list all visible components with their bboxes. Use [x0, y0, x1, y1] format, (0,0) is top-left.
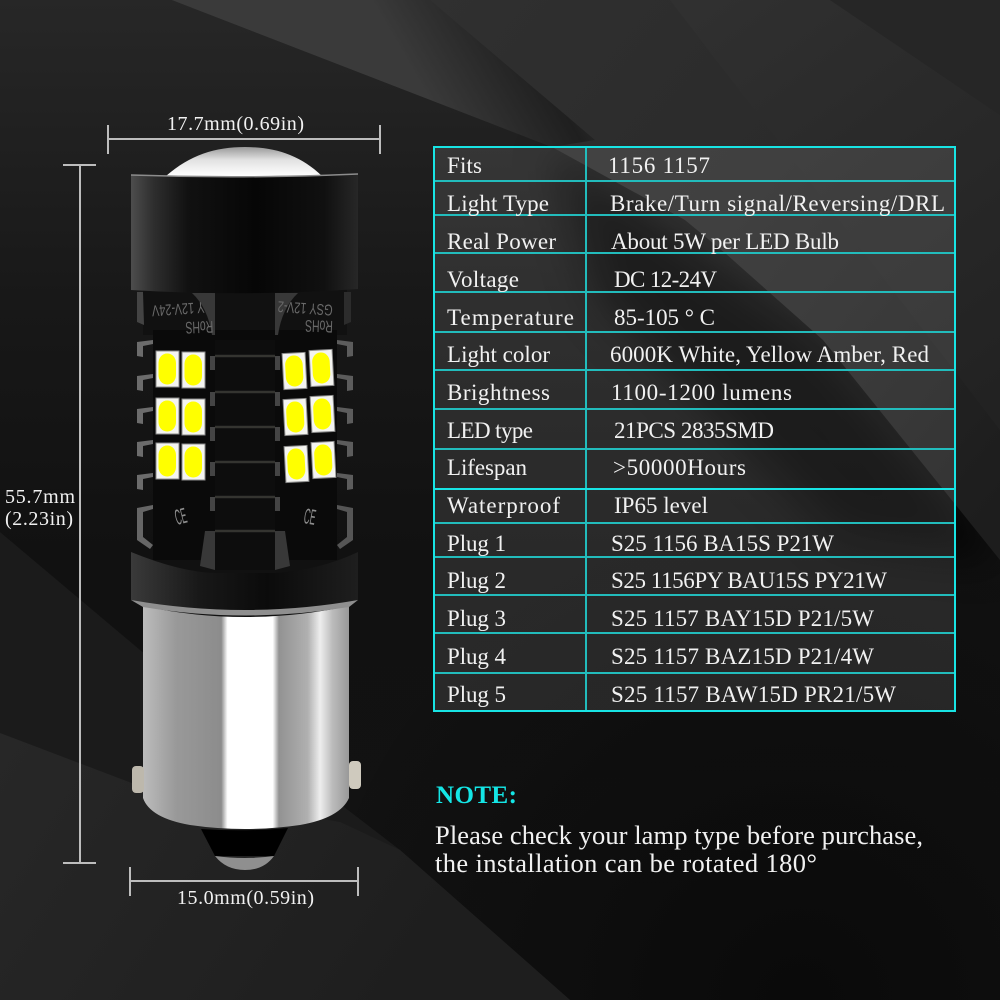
bayonet pin right — [349, 761, 361, 789]
printed board marks: GSY 12V-2 — [277, 298, 333, 319]
bayonet pin left — [132, 766, 144, 793]
printed board marks: CE — [302, 505, 318, 530]
printed board marks: CE — [173, 504, 189, 530]
row: brightness: Brightness — [447, 380, 550, 405]
row: LED type: LED type — [447, 418, 533, 443]
width dimension: 17.7mm — [108, 113, 380, 154]
silver base — [143, 606, 349, 829]
bulb illustration — [131, 147, 361, 870]
row: real power — [447, 229, 839, 254]
row: light type: Brake/Turn signal/Reversing/DRL — [610, 191, 945, 216]
row: plug 1: S25 1156 BA15S P21W — [611, 531, 834, 556]
row: voltage — [447, 267, 717, 292]
bulb body — [137, 285, 351, 570]
LED chips right — [282, 349, 336, 483]
row: real power: Real Power — [447, 229, 556, 254]
note text — [435, 820, 923, 878]
contact tip — [201, 828, 288, 870]
row: voltage: Voltage — [447, 267, 519, 292]
printed board marks: RoHS — [305, 316, 333, 337]
row: plug 1: Plug 1 — [447, 531, 506, 556]
row: fits — [447, 153, 710, 178]
cap rim highlight — [131, 174, 358, 177]
row: plug 4 — [447, 644, 874, 669]
row: lifespan: >50000Hours — [613, 455, 746, 480]
note heading: NOTE: — [436, 782, 517, 809]
row: light type: Light Type — [447, 191, 549, 216]
row: temperature — [447, 305, 715, 330]
top cap — [131, 174, 358, 293]
row: plug 4: Plug 4 — [447, 644, 506, 669]
specification table — [434, 147, 955, 711]
row: voltage: DC 12-24V — [614, 267, 717, 292]
lower collar — [131, 552, 358, 612]
row: plug 5: Plug 5 — [447, 682, 506, 707]
note text: the installation can be rotated 180° — [435, 848, 817, 878]
row: fits: 1156 1157 — [608, 153, 710, 178]
row: lifespan — [447, 455, 746, 480]
row: plug 3 — [447, 606, 874, 631]
row: plug 2: Plug 2 — [447, 568, 506, 593]
row: waterproof — [447, 493, 708, 518]
row: waterproof: Waterproof — [447, 493, 560, 518]
row: LED type: 21PCS 2835SMD — [614, 418, 774, 443]
row: plug 2 — [447, 568, 887, 593]
row: temperature: 85-105 ° C — [614, 305, 715, 330]
row: plug 5 — [447, 682, 896, 707]
fins — [137, 340, 353, 549]
row: fits: Fits — [447, 153, 482, 178]
row: lifespan: Lifespan — [447, 455, 528, 480]
row: light color: 6000K White, Yellow Amber, Red — [610, 342, 930, 367]
height dimension: 55.7mm: (2.23in) — [5, 508, 73, 530]
row: waterproof: IP65 level — [614, 493, 708, 518]
table panel fill — [434, 147, 955, 711]
printed board marks: Y 12V-24V — [151, 299, 205, 319]
row: temperature: Temperature — [447, 305, 574, 330]
row: light type — [447, 191, 945, 216]
row: plug 5: S25 1157 BAW15D PR21/5W — [611, 682, 896, 707]
row: light color: Light color — [447, 342, 550, 367]
row: LED type — [447, 418, 774, 443]
row: brightness: 1100-1200 lumens — [611, 380, 792, 405]
row: plug 1 — [447, 531, 834, 556]
printed board marks: RoHS — [185, 317, 214, 338]
width dimension: 17.7mm: 17.7mm(0.69in) — [167, 113, 304, 135]
note text: Please check your lamp type before purchase, — [435, 820, 923, 850]
row: real power: About 5W per LED Bulb — [611, 229, 839, 254]
LED chips left — [156, 351, 205, 480]
table grid lines — [434, 147, 955, 711]
base dimension: 15.0mm — [130, 867, 358, 909]
row: plug 3: Plug 3 — [447, 606, 506, 631]
row: plug 4: S25 1157 BAZ15D P21/4W — [611, 644, 874, 669]
collar rim highlight — [131, 600, 358, 616]
height dimension: 55.7mm: 55.7mm — [5, 486, 75, 508]
table border — [434, 147, 955, 711]
lens dome — [166, 147, 322, 176]
row: brightness — [447, 380, 792, 405]
row: light color — [447, 342, 930, 367]
base dimension: 15.0mm: 15.0mm(0.59in) — [177, 887, 314, 909]
height dimension: 55.7mm — [5, 165, 96, 863]
row: plug 3: S25 1157 BAY15D P21/5W — [611, 606, 874, 631]
row: plug 2: S25 1156PY BAU15S PY21W — [611, 568, 887, 593]
printed board marks — [151, 298, 333, 530]
